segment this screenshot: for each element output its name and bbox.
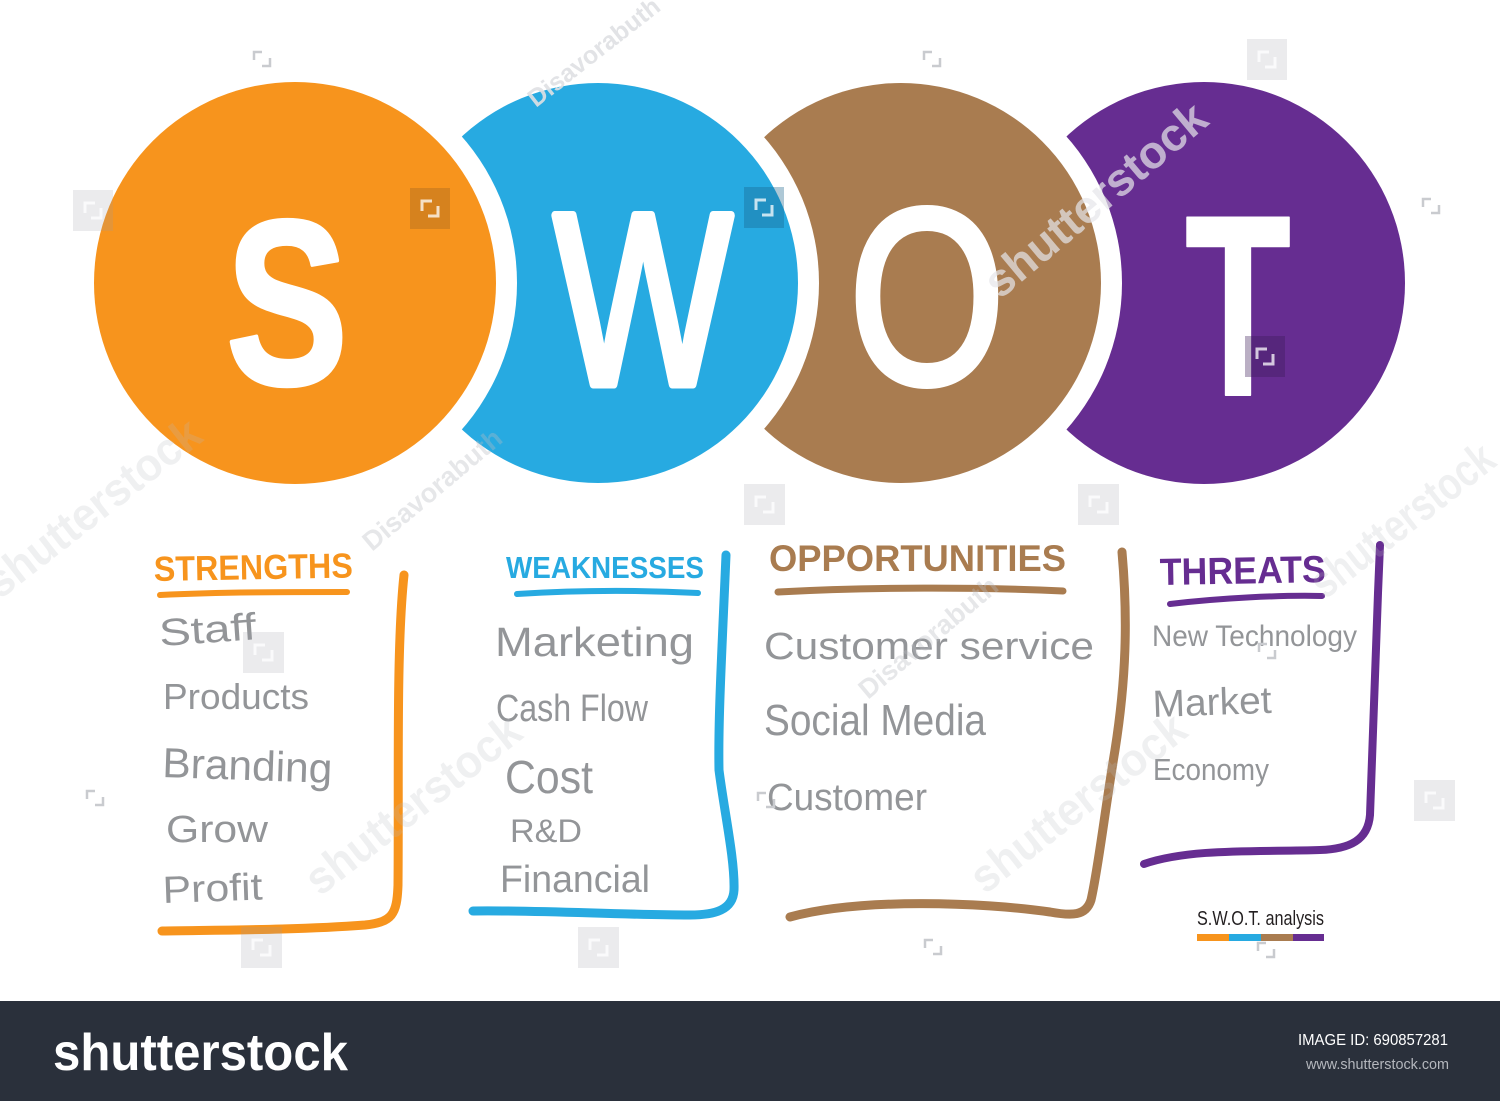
footer bar (0, 1001, 1500, 1101)
watermarks: shutterstock (959, 702, 1196, 903)
caption: S.W.O.T. analysis: S.W.O.T. analysis (1197, 908, 1324, 930)
item: Products (163, 676, 309, 717)
watermarks: shutterstock (973, 91, 1217, 308)
item: Marketing (495, 619, 694, 665)
ring: opportunities gap (680, 62, 1122, 504)
item: Grow (166, 809, 269, 851)
panel: strengths (153, 547, 404, 931)
item: Customer service (764, 626, 1094, 668)
panel: threats (1144, 545, 1380, 864)
ring: weaknesses gap (377, 62, 819, 504)
item: Customer (767, 777, 927, 819)
list: strengths (158, 606, 333, 912)
heading: opportunities: OPPORTUNITIES (769, 538, 1066, 579)
letter S: S (226, 171, 348, 434)
item: Staff (158, 606, 258, 655)
list: opportunities (764, 626, 1094, 819)
item: Branding (162, 739, 333, 792)
item: R&D (510, 813, 582, 849)
item: Cash Flow (496, 688, 648, 730)
letter W: W (554, 162, 732, 436)
item: Financial (500, 859, 650, 901)
panel: weaknesses (473, 550, 734, 915)
letter O: O (849, 157, 1005, 436)
letter T: T (1185, 161, 1291, 450)
list: weaknesses (495, 619, 694, 901)
footer logo: shutterstock (53, 1024, 348, 1082)
ring: strengths gap (73, 61, 517, 505)
underline: weaknesses (517, 591, 698, 594)
panel: opportunities (764, 538, 1125, 917)
item: Economy (1153, 752, 1269, 787)
footer url: www.shutterstock.com (1305, 1056, 1449, 1073)
underline: strengths (160, 592, 347, 595)
bracket: weaknesses (473, 555, 734, 915)
item: Cost (505, 751, 593, 803)
circle: threats (1003, 82, 1405, 484)
heading: strengths: STRENGTHS (153, 547, 353, 589)
circle: weaknesses (398, 83, 798, 483)
watermarks: Disavorabuth (357, 423, 508, 557)
circle: strengths (94, 82, 496, 484)
bracket: threats (1144, 545, 1380, 864)
underline: opportunities (778, 588, 1063, 592)
list: threats (1152, 620, 1357, 787)
heading: weaknesses: WEAKNESSES (506, 550, 704, 585)
item: Market (1152, 680, 1273, 726)
underline: threats (1170, 596, 1322, 604)
item: Profit (162, 867, 264, 912)
caption: S.W.O.T. analysis (1197, 908, 1324, 941)
watermarks: Disavorabuth (853, 571, 1004, 705)
bracket: strengths (162, 575, 404, 931)
item: Social Media (764, 696, 986, 745)
image id: IMAGE ID: 690857281 (1298, 1032, 1448, 1049)
item: New Technology (1152, 620, 1357, 653)
heading: threats: THREATS (1159, 549, 1326, 594)
watermarks: shutterstock (294, 704, 531, 905)
circle: opportunities (701, 83, 1101, 483)
bracket: opportunities (790, 552, 1125, 917)
